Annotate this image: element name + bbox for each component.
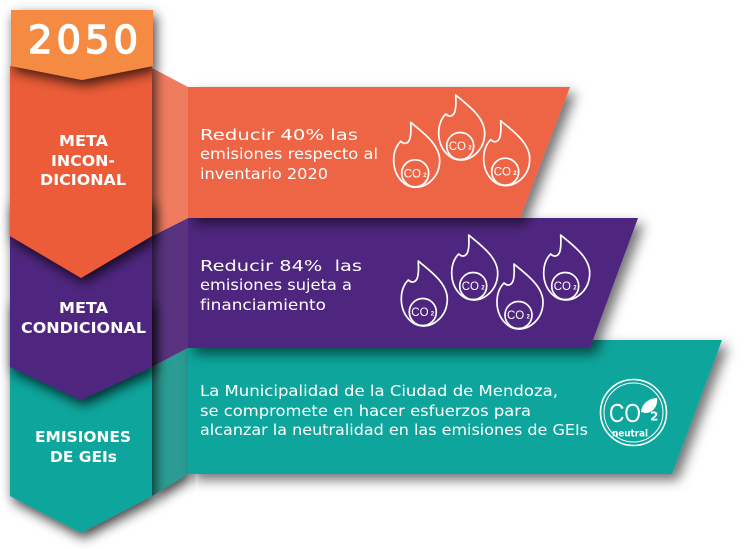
icon: CO2 flame 2: CO [449,141,466,153]
icon: CO2 flame 4: 2 [573,286,577,292]
icon: CO2 flame 1: CO [404,168,421,180]
text: municipal commitment: La Municipalidad de la Ciudad de Mendoza, [200,382,558,400]
text: conditional goal: financiamiento [200,296,326,314]
icon: CO2 flame 1 [394,122,440,187]
icon: CO2 flame 3: CO [494,167,511,179]
tab: year 2050 [11,10,153,80]
icon: CO2 flame 2 [439,95,485,160]
text: unconditional goal: Reducir 40% las [200,126,358,144]
heading: meta incondicional: DICIONAL [40,171,126,189]
icon: CO2 flame 2 [452,235,498,300]
heading: emisiones de GEIs: EMISIONES [35,428,131,446]
panel: orange band [188,87,570,218]
icon: CO2 neutral badge [600,380,666,446]
icon: CO2 flame 3 [484,121,530,186]
icon: CO2 neutral badge: neutral [612,428,648,440]
heading: meta condicional: META [59,299,108,317]
icon: CO2 flame 1: 2 [431,312,435,318]
text: municipal commitment: se compromete en hacer esfuerzos para [200,402,531,420]
icon: CO2 flame 2: CO [462,281,479,293]
icon: CO2 flame 2: 2 [468,146,472,152]
icon: CO2 flame 2: 2 [481,286,485,292]
text: unconditional goal: emisiones respecto al [200,145,378,163]
icon: CO2 flame 3: CO [507,310,524,322]
fold: teal [152,348,188,496]
icon: CO2 neutral badge: CO [609,398,641,428]
text: municipal commitment [200,382,588,439]
icon: CO2 flame 3 [497,264,543,329]
heading: emisiones de GEIs: DE GEIs [50,448,117,466]
icon: CO2 flame 3: 2 [513,171,517,177]
text: conditional goal: Reducir 84% las [200,257,362,275]
icon: CO2 flame 4: CO [554,281,571,293]
icon: CO2 flame 1: 2 [423,173,427,179]
heading: meta incondicional [40,132,126,189]
icon: CO2 flame 1 [401,261,447,326]
heading: emisiones de GEIs [35,428,131,466]
icon: CO2 flame 3: 2 [526,314,530,320]
icon: CO2 flame 4 [544,235,590,300]
text: conditional goal: emisiones sujeta a [200,276,352,294]
arrow: orange, unconditional goal [10,66,152,278]
text: unconditional goal [200,126,378,183]
panel: purple band [188,218,638,348]
icon: CO2 neutral badge: 2 [650,410,658,424]
heading: 2050: 2050 [28,18,138,63]
heading: meta condicional: CONDICIONAL [21,319,146,337]
heading: meta incondicional: INCON- [51,152,115,170]
fold: orange [152,68,188,236]
heading: meta incondicional: META [59,132,108,150]
text: municipal commitment: alcanzar la neutralidad en las emisiones de GEIs [200,421,588,439]
heading: meta condicional [21,299,146,337]
arrow: purple, conditional goal [10,200,152,400]
fold: purple [152,218,188,367]
panel: teal band [188,340,722,474]
text: unconditional goal: inventario 2020 [200,165,328,183]
arrow: teal, GHG emissions [10,300,152,533]
text: conditional goal [200,257,362,314]
icon: CO2 flame 1: CO [411,307,429,319]
